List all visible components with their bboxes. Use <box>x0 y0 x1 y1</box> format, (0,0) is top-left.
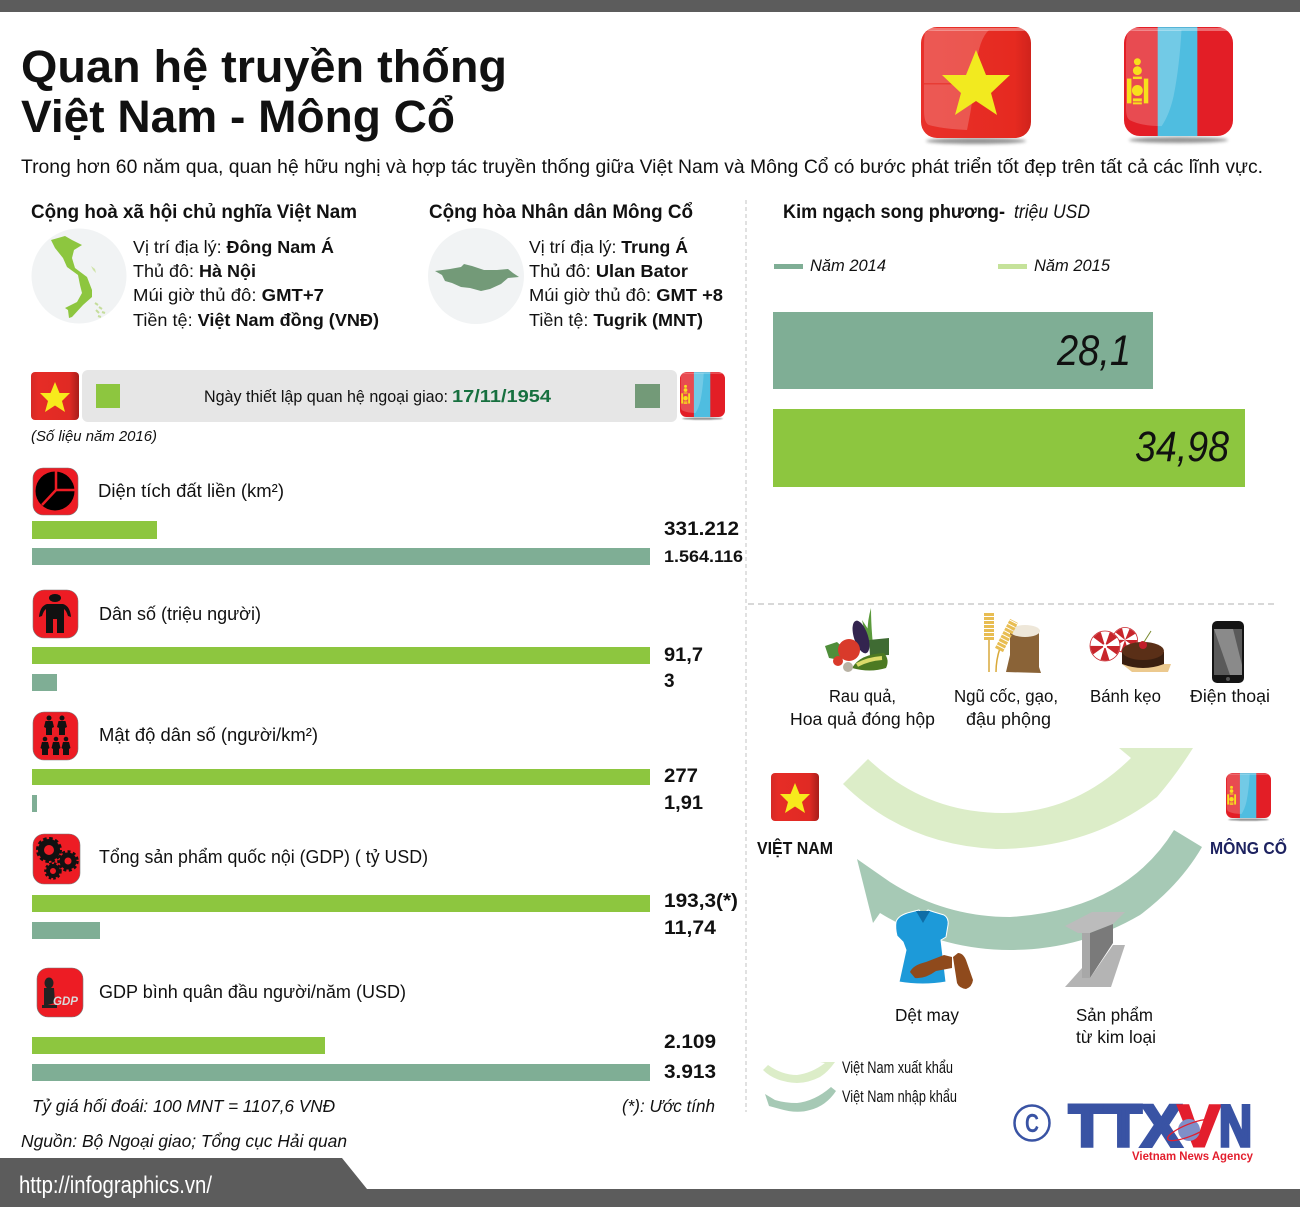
values <box>664 766 703 814</box>
legend: trade years: Năm 2014 <box>810 256 886 275</box>
footer bar with url: http://infographics.vn/ <box>19 1172 212 1199</box>
info: Mongolia: Vị trí địa lý: Trung Á <box>529 236 688 257</box>
logo: TTXVN: Vietnam News Agency <box>1132 1151 1254 1163</box>
bars <box>32 769 650 812</box>
label: phone: Điện thoại <box>1190 686 1270 706</box>
icon: vegetables <box>825 608 889 672</box>
values: 277 <box>664 766 698 787</box>
panel: GDP per capita <box>32 968 716 1083</box>
info: Vietnam: Múi giờ thủ đô: GMT+7 <box>133 285 324 305</box>
label: vegetables: Hoa quả đóng hộp <box>790 709 935 729</box>
icon: GDP person <box>37 968 83 1017</box>
bars <box>32 647 650 691</box>
label: metal products: Sản phẩm <box>1076 1005 1153 1025</box>
label: Dân số (triệu người) <box>99 603 261 624</box>
bar chart: trade value: 34,98 <box>1135 423 1229 471</box>
logo: TTXVN: N <box>1219 1094 1252 1159</box>
icon: people group <box>33 712 78 760</box>
bar chart: trade value <box>773 312 1245 487</box>
info: Vietnam: Vị trí địa lý: Đông Nam Á <box>133 236 334 257</box>
values: 1,91 <box>664 793 703 814</box>
icon: candy and cake <box>1090 628 1171 672</box>
logo: TTXVN: C <box>1025 1108 1039 1138</box>
flag: Mongolia large <box>1124 27 1233 143</box>
note: exchange rate: Tỷ giá hối đoái: 100 MNT = 1107,6 VNĐ <box>32 1096 335 1116</box>
source: Nguồn: Bộ Ngoại giao; Tổng cục Hải quan <box>21 1131 347 1151</box>
label: vegetables: Rau quả, <box>829 686 896 706</box>
values: 193,3(*) <box>664 891 738 912</box>
values: 3 <box>664 671 675 692</box>
label: grain: đậu phộng <box>966 709 1051 729</box>
label: candy: Bánh kẹo <box>1090 686 1161 706</box>
top bar <box>0 0 1300 12</box>
flag: Vietnam trade <box>771 773 819 821</box>
legend: trade direction: Việt Nam nhập khẩu <box>842 1087 957 1106</box>
panel: diplomatic relations date bar: 17/11/1954 <box>452 386 551 406</box>
label: metal products <box>1076 1005 1156 1047</box>
values <box>664 1032 716 1083</box>
values: 3.913 <box>664 1062 716 1083</box>
values: 91,7 <box>664 645 703 666</box>
icon: person <box>33 590 78 638</box>
label: Vietnam: VIỆT NAM <box>757 837 833 858</box>
flag: Mongolia trade <box>1226 773 1271 821</box>
heading: Mongolia: Cộng hòa Nhân dân Mông Cổ <box>429 202 693 223</box>
arrow: Vietnam imports <box>857 830 1202 950</box>
icon: gears <box>33 834 80 884</box>
bars <box>32 1037 650 1081</box>
flag: Mongolia small <box>680 372 725 420</box>
icon: GDP person: GDP <box>53 994 79 1008</box>
info: Mongolia: Thủ đô: Ulan Bator <box>529 261 688 281</box>
info: Vietnam <box>133 236 379 330</box>
values: 331.212 <box>664 519 739 540</box>
logo: TTXVN: TTX <box>1069 1094 1181 1159</box>
panel: diplomatic relations date bar: Ngày thiết lập quan hệ ngoại giao: <box>204 388 448 406</box>
info: Mongolia: Múi giờ thủ đô: GMT +8 <box>529 285 723 305</box>
panel: Mongolia profile <box>428 202 723 330</box>
legend: trade direction: Việt Nam xuất khẩu <box>842 1058 953 1077</box>
info: Mongolia <box>529 236 723 330</box>
heading: Vietnam: Cộng hoà xã hội chủ nghĩa Việt Nam <box>31 202 357 223</box>
label: vegetables <box>790 686 935 729</box>
logo: TTXVN: V <box>1178 1094 1220 1159</box>
info: Vietnam: Tiền tệ: Việt Nam đồng (VNĐ) <box>133 310 379 330</box>
label: textiles: Dệt may <box>895 1005 959 1025</box>
label: Tổng sản phẩm quốc nội (GDP) ( tỷ USD) <box>99 846 428 867</box>
bars <box>32 895 650 939</box>
bars <box>32 521 650 565</box>
footer bar with url <box>0 1158 1300 1207</box>
intro text: Trong hơn 60 năm qua, quan hệ hữu nghị và hợp tác truyền thống giữa Việt Nam và Mông Cổ có bước phát triển tốt đẹp trên tất cả các lĩnh vực. <box>21 156 1263 178</box>
label: grain: Ngũ cốc, gạo, <box>954 686 1058 706</box>
vertical divider <box>745 200 747 1112</box>
label: Mongolia: MÔNG CỔ <box>1210 837 1287 858</box>
title: Việt Nam - Mông Cổ <box>21 91 455 142</box>
panel: Vietnam profile <box>31 202 379 330</box>
icon: pie chart <box>33 468 78 515</box>
panel: population density <box>32 712 703 814</box>
icon: phone <box>1212 621 1244 683</box>
note: estimate: (*): Ước tính <box>622 1096 715 1116</box>
map: Mongolia <box>428 228 524 324</box>
values: 11,74 <box>664 918 716 939</box>
values <box>664 891 738 939</box>
label: Mật độ dân số (người/km²) <box>99 724 318 745</box>
title: Quan hệ truyền thống <box>21 41 507 92</box>
heading: bilateral trade: triệu USD <box>1014 202 1090 223</box>
icon: shirt and shoes <box>896 910 973 989</box>
map: Vietnam <box>32 228 126 324</box>
label: Diện tích đất liền (km²) <box>98 480 284 501</box>
panel: population <box>32 590 703 692</box>
flag: Vietnam large <box>921 27 1031 144</box>
legend: trade direction <box>763 1058 957 1112</box>
values: 1.564.116 <box>664 547 743 566</box>
arrow: Vietnam exports <box>843 748 1193 849</box>
heading: bilateral trade: Kim ngạch song phương- <box>783 202 1005 223</box>
panel: GDP <box>32 834 738 939</box>
legend: trade years <box>774 256 1111 275</box>
values <box>664 519 743 566</box>
info: Mongolia: Tiền tệ: Tugrik (MNT) <box>529 310 703 330</box>
panel: diplomatic relations date bar <box>82 370 677 422</box>
values: 2.109 <box>664 1032 716 1053</box>
legend: trade years: Năm 2015 <box>1034 256 1111 275</box>
logo: TTXVN <box>1014 1094 1254 1163</box>
label: GDP bình quân đầu người/năm (USD) <box>99 981 406 1002</box>
values <box>664 645 703 692</box>
note: data year: (Số liệu năm 2016) <box>31 428 157 445</box>
icon: steel beam <box>1065 912 1125 987</box>
label: grain <box>954 686 1058 729</box>
icon: grain and sack <box>989 612 1041 673</box>
flag: Vietnam small <box>31 372 79 420</box>
label: metal products: từ kim loại <box>1076 1027 1156 1047</box>
info: Vietnam: Thủ đô: Hà Nội <box>133 261 256 281</box>
title <box>21 41 507 142</box>
panel: land area <box>32 468 743 566</box>
bar chart: trade value: 28,1 <box>1056 327 1131 375</box>
